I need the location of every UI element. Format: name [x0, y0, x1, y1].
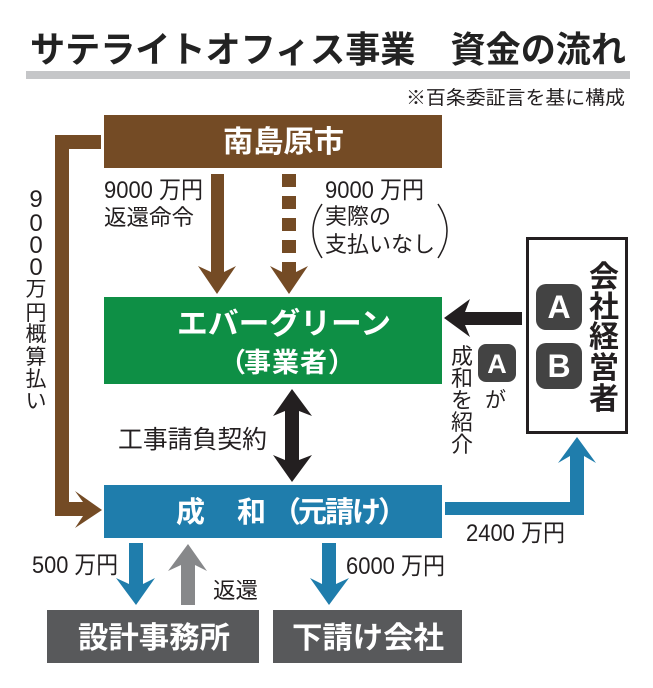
arrow: return order: [198, 174, 236, 294]
label: A introduced Seiwa: [451, 344, 516, 457]
label: return order: 9000 万円: [104, 177, 203, 204]
label: return: 返還: [213, 578, 258, 603]
label: A introduced Seiwa: が: [485, 389, 506, 412]
label: 60 million yen: 6000 万円: [346, 553, 445, 580]
label: no actual payment: 9000 万円: [325, 177, 424, 204]
panel heading: Seiwa: 成和（元請け）: [176, 496, 407, 529]
label: no actual payment: 実際の: [325, 204, 391, 229]
arrow: blue to subcontractor: [310, 543, 349, 605]
vertical heading: company managers: 会社経営者: [589, 261, 619, 416]
panel: Minamishimabara city: [104, 115, 442, 168]
label: 5 million yen: 500 万円: [32, 552, 118, 579]
badge B: B: [547, 348, 571, 384]
badge A: [536, 284, 582, 330]
arrow: dashed no actual payment: [270, 174, 308, 294]
title: サテライトオフィス事業 資金の流れ: [30, 29, 626, 70]
label: no actual payment: [313, 177, 447, 258]
panel: company managers: [528, 238, 626, 432]
arrow: brown elbow city to Seiwa: [55, 135, 102, 528]
label: 90 million yen advance payment: 万円概算払い: [26, 278, 46, 413]
label: no actual payment: 支払いなし: [325, 232, 435, 257]
arrow: black double arrow: [273, 389, 312, 482]
source note: ※百条委証言を基に構成: [406, 87, 625, 109]
panel subheading: contractor: （事業者）: [219, 348, 355, 378]
label: construction contract: 工事請負契約: [118, 426, 267, 454]
arrow: black left arrow: [444, 299, 522, 337]
panel: Evergreen: [104, 297, 442, 384]
panel heading: Evergreen: エバーグリーン: [177, 308, 391, 341]
title underline: [26, 71, 630, 79]
arrow: grey return: [168, 544, 207, 605]
arrow: blue elbow to managers: [445, 437, 596, 515]
label: 24 million yen: 2400 万円: [466, 520, 565, 547]
panel: design office: [47, 610, 259, 663]
panel heading: subcontractor: 下請け会社: [292, 622, 444, 655]
panel: Seiwa: [104, 485, 442, 538]
label: 90 million yen advance payment: [26, 186, 46, 413]
badge B: [536, 343, 582, 389]
label: A introduced Seiwa: 成和を紹介: [451, 344, 473, 457]
panel heading: city: 南島原市: [223, 126, 344, 159]
panel heading: design office: 設計事務所: [78, 622, 230, 655]
arrow: blue to design office: [116, 543, 155, 605]
label: return order: [104, 177, 203, 230]
badge A: A: [547, 289, 571, 325]
label: A introduced Seiwa: A: [487, 349, 507, 379]
label: 90 million yen advance payment: 9000: [29, 186, 43, 281]
panel: subcontractor: [273, 610, 462, 663]
label: return order: 返還命令: [104, 205, 194, 230]
